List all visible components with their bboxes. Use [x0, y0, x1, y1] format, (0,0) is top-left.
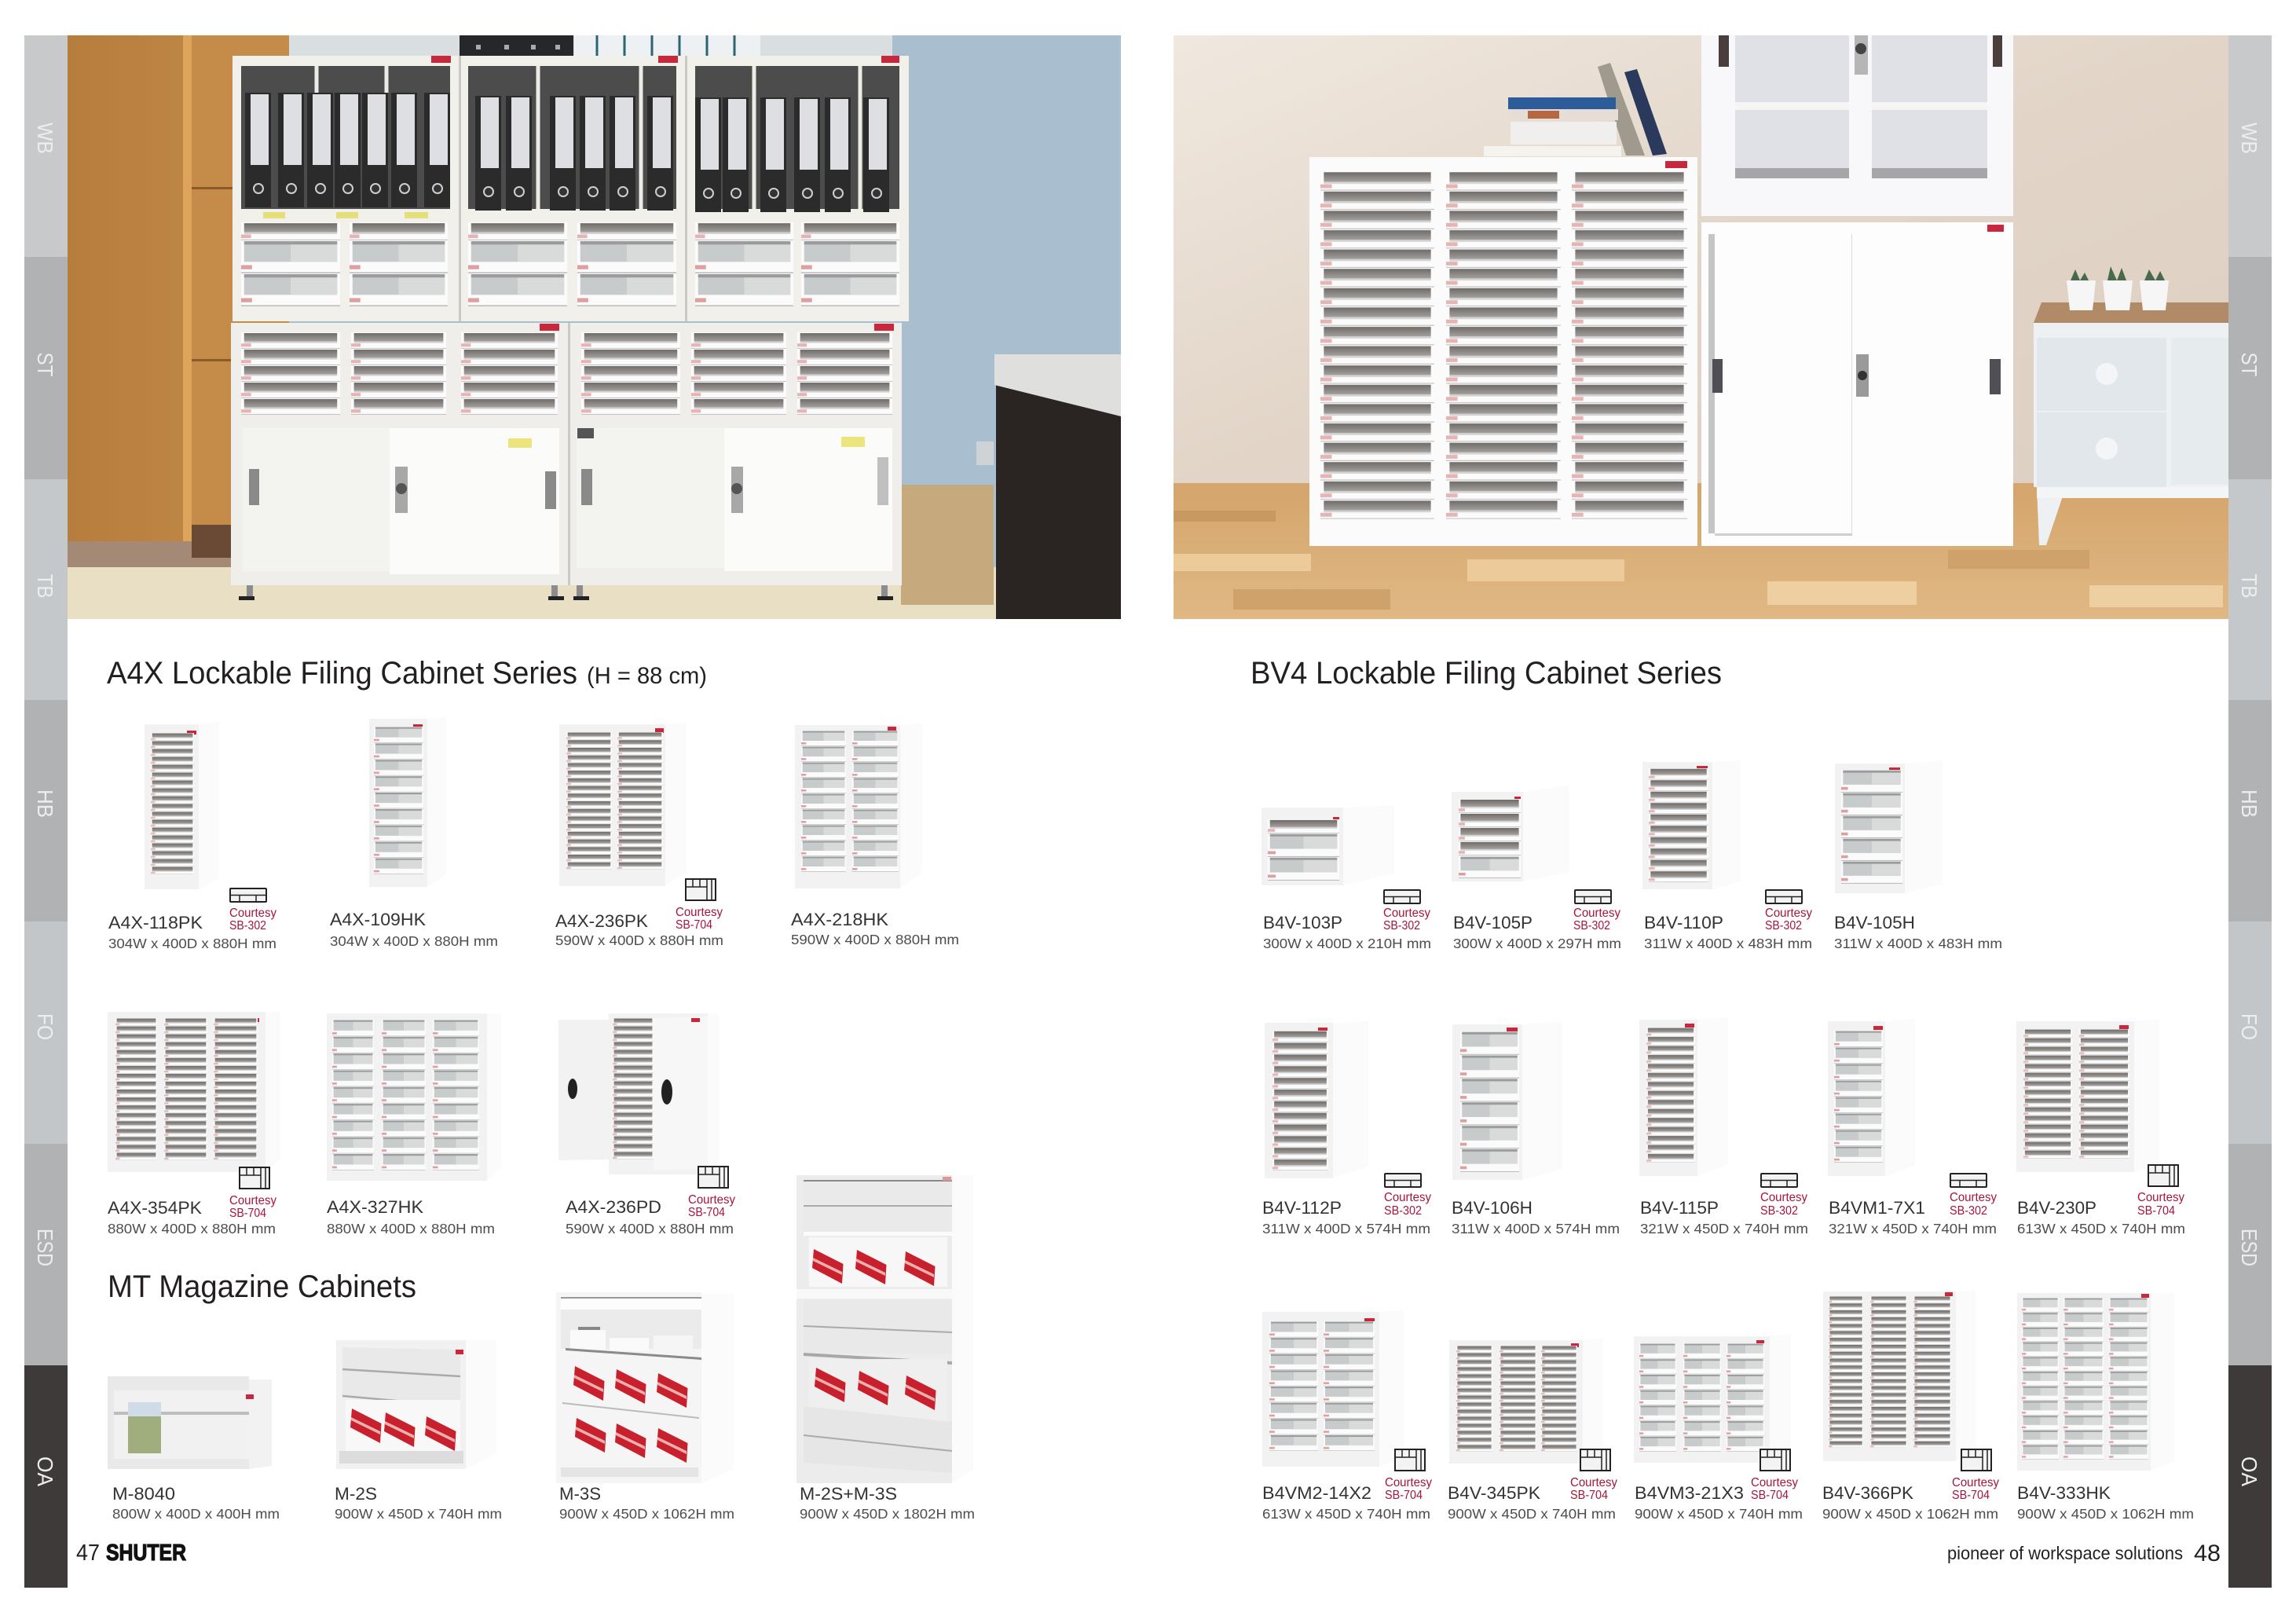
product: B4VM3-21X3: 900W x 450D x 740H mm	[1635, 1506, 1803, 1522]
product: M-2S+M-3S: M-2S+M-3S	[800, 1484, 897, 1504]
product: B4V-366PK: 900W x 450D x 1062H mm	[1822, 1506, 1998, 1522]
product: A4X-118PK: Courtesy	[229, 907, 276, 920]
floor planks	[1174, 511, 2223, 610]
product: B4V-105P: B4V-105P	[1453, 913, 1532, 932]
product: B4V-115P	[1639, 1017, 1808, 1236]
product: M-2S	[335, 1340, 502, 1522]
right sidebar: section tabs: OA	[2237, 1456, 2261, 1486]
right sidebar: section tabs	[2228, 35, 2272, 1588]
product: A4X-109HK: A4X-109HK	[330, 910, 426, 929]
product: B4V-106H: 311W x 400D x 574H mm	[1452, 1221, 1620, 1236]
product: B4V-103P: 300W x 400D x 210H mm	[1263, 936, 1431, 951]
product: M-8040: 800W x 400D x 400H mm	[112, 1506, 280, 1522]
product: A4X-109HK	[330, 717, 498, 949]
product: B4V-112P: Courtesy	[1384, 1191, 1431, 1204]
left sidebar: section tabs	[24, 35, 68, 1588]
product: A4X-218HK: A4X-218HK	[791, 910, 888, 929]
product: B4VM2-14X2: Courtesy	[1385, 1476, 1432, 1489]
product: A4X-236PK: A4X-236PK	[555, 911, 648, 931]
books	[1484, 63, 1667, 156]
product: M-8040: M-8040	[112, 1484, 175, 1504]
product: B4V-115P: Courtesy	[1760, 1191, 1807, 1204]
product: M-3S: M-3S	[559, 1484, 601, 1504]
right sidebar: section tabs: FO	[2237, 1013, 2261, 1040]
product: B4V-103P	[1262, 805, 1431, 951]
heading: BV4 series: BV4 Lockable Filing Cabinet Series	[1251, 656, 1722, 691]
product: A4X-354PK: SB-704	[229, 1207, 266, 1220]
product: B4VM2-14X2: B4VM2-14X2	[1262, 1483, 1371, 1503]
product: A4X-327HK	[327, 1013, 501, 1236]
product: A4X-118PK: 304W x 400D x 880H mm	[108, 936, 276, 951]
product: B4V-230P: B4V-230P	[2017, 1198, 2096, 1218]
product: A4X-218HK	[791, 724, 959, 947]
footer: page 47 and SHUTER logo: 47	[76, 1541, 100, 1566]
product: A4X-236PK: 590W x 400D x 880H mm	[555, 932, 723, 948]
product: M-2S+M-3S	[796, 1175, 975, 1522]
product: B4VM3-21X3: SB-704	[1751, 1489, 1789, 1502]
product: B4V-105H: 311W x 400D x 483H mm	[1834, 936, 2002, 951]
side cabinet with plants	[2034, 266, 2228, 545]
product: A4X-236PK: SB-704	[676, 918, 712, 932]
left sidebar: section tabs: HB	[33, 790, 57, 818]
product: M-8040	[108, 1376, 280, 1522]
product: B4VM2-14X2: 613W x 450D x 740H mm	[1262, 1506, 1430, 1522]
product: B4V-345PK: SB-704	[1570, 1489, 1608, 1502]
product: M-3S	[556, 1292, 734, 1522]
product: B4V-110P: SB-302	[1765, 919, 1802, 932]
sliding-door cabinet	[1701, 222, 2013, 546]
product: M-2S: 900W x 450D x 740H mm	[335, 1506, 502, 1522]
right sidebar: section tabs: ESD	[2237, 1229, 2261, 1266]
product: B4V-103P: Courtesy	[1383, 907, 1430, 920]
product: B4V-333HK	[2017, 1292, 2194, 1522]
product: A4X-236PD: 590W x 400D x 880H mm	[566, 1221, 734, 1236]
product: A4X-109HK: 304W x 400D x 880H mm	[330, 933, 498, 949]
product: B4V-230P: Courtesy	[2137, 1191, 2184, 1204]
photo: A4X cabinets in office	[68, 35, 1121, 619]
product: B4V-103P: B4V-103P	[1263, 913, 1342, 932]
product: A4X-236PD	[558, 1013, 735, 1236]
product: A4X-354PK: A4X-354PK	[108, 1198, 202, 1218]
left sidebar: section tabs: WB	[33, 123, 57, 154]
heading: MT Magazine Cabinets: MT Magazine Cabinets	[108, 1269, 416, 1304]
product: A4X-218HK: 590W x 400D x 880H mm	[791, 932, 959, 947]
lower cabinets with drawers and sliding doors	[231, 323, 902, 600]
product: B4V-366PK: Courtesy	[1952, 1476, 1999, 1489]
left sidebar: section tabs: OA	[33, 1456, 57, 1486]
product: B4V-366PK	[1822, 1291, 1999, 1522]
heading: A4X series: (H = 88 cm)	[587, 663, 707, 689]
product: A4X-354PK	[108, 1012, 280, 1236]
right sidebar: section tabs: HB	[2237, 790, 2261, 818]
product: B4V-230P: 613W x 450D x 740H mm	[2017, 1221, 2185, 1236]
product: M-3S: 900W x 450D x 1062H mm	[559, 1506, 734, 1522]
product: A4X-327HK: 880W x 400D x 880H mm	[327, 1221, 495, 1236]
product: B4V-106H	[1452, 1021, 1620, 1236]
product: B4VM1-7X1	[1828, 1019, 1997, 1236]
footer: slogan and page 48: 48	[2194, 1541, 2221, 1566]
product: B4V-230P: SB-704	[2137, 1204, 2175, 1218]
product: B4VM2-14X2: SB-704	[1385, 1489, 1423, 1502]
product: B4V-345PK: B4V-345PK	[1448, 1483, 1540, 1503]
product: B4V-112P: B4V-112P	[1262, 1198, 1342, 1218]
product: B4V-333HK: B4V-333HK	[2017, 1483, 2111, 1503]
product: B4V-105P: 300W x 400D x 297H mm	[1453, 936, 1621, 951]
product: A4X-118PK	[108, 721, 276, 951]
product: B4V-105P: SB-302	[1573, 919, 1610, 932]
product: B4VM2-14X2	[1262, 1310, 1432, 1522]
drawer cabinet	[1309, 157, 1697, 546]
footer: page 47 and SHUTER logo	[76, 1541, 186, 1566]
product: M-2S+M-3S: 900W x 450D x 1802H mm	[800, 1506, 975, 1522]
product: B4V-105P: Courtesy	[1573, 907, 1620, 920]
product: B4VM1-7X1: SB-302	[1950, 1204, 1987, 1218]
product: B4VM1-7X1: Courtesy	[1950, 1191, 1997, 1204]
product: A4X-327HK: A4X-327HK	[327, 1197, 423, 1217]
product: B4VM3-21X3: B4VM3-21X3	[1635, 1483, 1744, 1503]
product: B4VM3-21X3	[1634, 1334, 1803, 1522]
product: B4V-345PK	[1448, 1338, 1617, 1522]
product: B4V-110P: B4V-110P	[1644, 913, 1723, 932]
product: B4V-366PK: SB-704	[1952, 1489, 1990, 1502]
product: B4V-112P: 311W x 400D x 574H mm	[1262, 1221, 1430, 1236]
desk	[994, 354, 1121, 619]
upper cabinets with binders	[233, 56, 909, 321]
product: B4V-115P: B4V-115P	[1640, 1198, 1719, 1218]
left sidebar: section tabs: ESD	[33, 1229, 57, 1266]
right sidebar: section tabs: ST	[2237, 352, 2261, 377]
photo: BV4 cabinets in room	[1174, 35, 2228, 619]
product: A4X-354PK: 880W x 400D x 880H mm	[108, 1221, 276, 1236]
product: M-2S: M-2S	[335, 1484, 377, 1504]
product: B4VM1-7X1: B4VM1-7X1	[1829, 1198, 1925, 1218]
right sidebar: section tabs: WB	[2237, 123, 2261, 154]
product: A4X-118PK: SB-302	[229, 919, 266, 932]
left sidebar: section tabs: TB	[33, 573, 57, 599]
product: B4VM1-7X1: 321W x 450D x 740H mm	[1829, 1221, 1997, 1236]
right sidebar: section tabs: TB	[2237, 573, 2261, 599]
product: B4V-110P: Courtesy	[1765, 907, 1812, 920]
product: B4V-105H: B4V-105H	[1834, 913, 1915, 932]
footer: page 47 and SHUTER logo: SHUTER	[106, 1541, 186, 1566]
product: B4V-110P: 311W x 400D x 483H mm	[1644, 936, 1812, 951]
product: B4V-230P	[2016, 1019, 2185, 1236]
left sidebar: section tabs: FO	[33, 1013, 57, 1040]
left sidebar: section tabs: ST	[33, 352, 57, 377]
product: B4V-105H	[1834, 760, 2002, 951]
product: B4VM3-21X3: Courtesy	[1751, 1476, 1798, 1489]
product: B4V-105P	[1452, 786, 1621, 951]
footer: slogan and page 48: pioneer of workspace solutions	[1947, 1543, 2183, 1563]
product: A4X-236PD: SB-704	[688, 1206, 725, 1219]
product: B4V-110P	[1642, 760, 1812, 951]
product: B4V-112P	[1262, 1021, 1431, 1236]
product: A4X-236PD: A4X-236PD	[566, 1197, 661, 1217]
product: B4V-115P: 321W x 450D x 740H mm	[1640, 1221, 1808, 1236]
product: B4V-115P: SB-302	[1760, 1204, 1798, 1218]
product: A4X-236PK	[555, 723, 723, 948]
product: B4V-345PK: 900W x 450D x 740H mm	[1448, 1506, 1616, 1522]
product: B4V-103P: SB-302	[1383, 919, 1420, 932]
heading: A4X series: A4X Lockable Filing Cabinet Series	[107, 656, 577, 691]
product: A4X-118PK: A4X-118PK	[108, 913, 203, 932]
product: B4V-366PK: B4V-366PK	[1822, 1483, 1913, 1503]
product: B4V-345PK: Courtesy	[1570, 1476, 1617, 1489]
product: A4X-236PD: Courtesy	[688, 1193, 735, 1207]
product: B4V-106H: B4V-106H	[1452, 1198, 1532, 1218]
product: A4X-354PK: Courtesy	[229, 1194, 276, 1207]
product: A4X-236PK: Courtesy	[676, 906, 723, 919]
glass-door cabinet	[1701, 35, 2013, 216]
product: B4V-333HK: 900W x 450D x 1062H mm	[2017, 1506, 2194, 1522]
product: B4V-112P: SB-302	[1384, 1204, 1422, 1218]
